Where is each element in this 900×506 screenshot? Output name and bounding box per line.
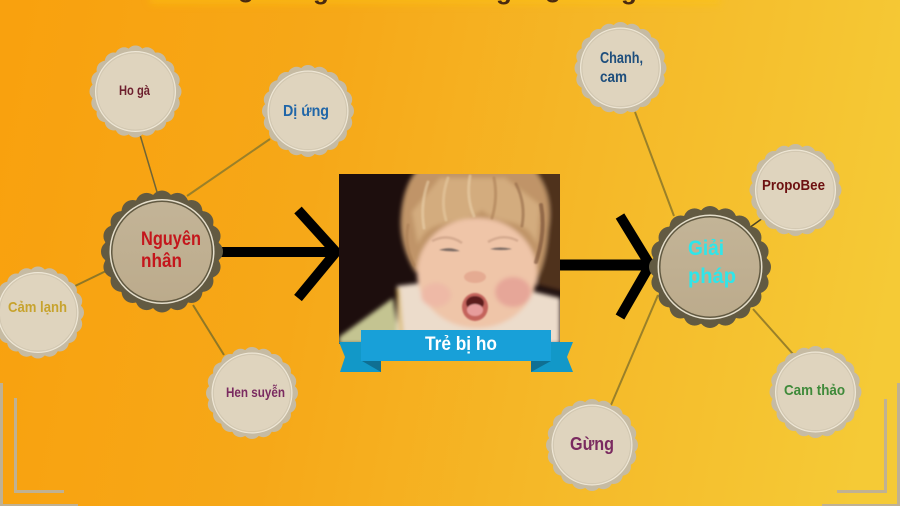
- label: Dị ứng: Dị ứng: [283, 103, 329, 120]
- corner bracket: bottom left: [0, 383, 78, 506]
- label: Ho gà: Ho gà: [119, 82, 150, 98]
- node: Hen suyễn: [208, 350, 296, 436]
- label: Nguyên nhân: Nguyên: [141, 229, 201, 250]
- label: Giải pháp: Giải: [688, 237, 724, 260]
- arrow: causes to child: [218, 210, 336, 298]
- label: Cam thảo: Cam thảo: [784, 382, 845, 399]
- label: Chanh, cam: Chanh,: [600, 50, 643, 67]
- node: PropoBee: [752, 146, 839, 234]
- arrow: child to solutions: [560, 216, 650, 317]
- label: Gừng: Gừng: [570, 434, 614, 454]
- label: PropoBee: PropoBee: [762, 177, 825, 194]
- node: Nguyên nhân: [104, 194, 220, 309]
- label: Nguyên nhân: nhân: [141, 251, 182, 272]
- node: Dị ứng: [264, 68, 352, 154]
- ribbon banner: Trẻ bị ho: [339, 330, 573, 372]
- label: Cảm lạnh: Cảm lạnh: [8, 299, 67, 316]
- node: Cảm lạnh: [0, 269, 82, 356]
- node: Chanh, cam: [577, 24, 664, 112]
- photo: coughing child: [339, 165, 566, 344]
- corner bracket: bottom right: [822, 383, 900, 506]
- node: Cam thảo: [772, 348, 859, 436]
- label: Giải pháp: pháp: [688, 265, 736, 288]
- label: Hen suyễn: Hen suyễn: [226, 384, 285, 400]
- node: Giải pháp: [652, 210, 768, 324]
- node: Ho gà: [92, 48, 179, 135]
- label: Chanh, cam: cam: [600, 69, 627, 86]
- ribbon label: Trẻ bị ho: [425, 334, 497, 355]
- title (cut off at top edge): [150, 0, 720, 5]
- connector lines: causes: [75, 128, 270, 355]
- node: Gừng: [548, 402, 636, 488]
- connector lines: solutions: [611, 112, 793, 405]
